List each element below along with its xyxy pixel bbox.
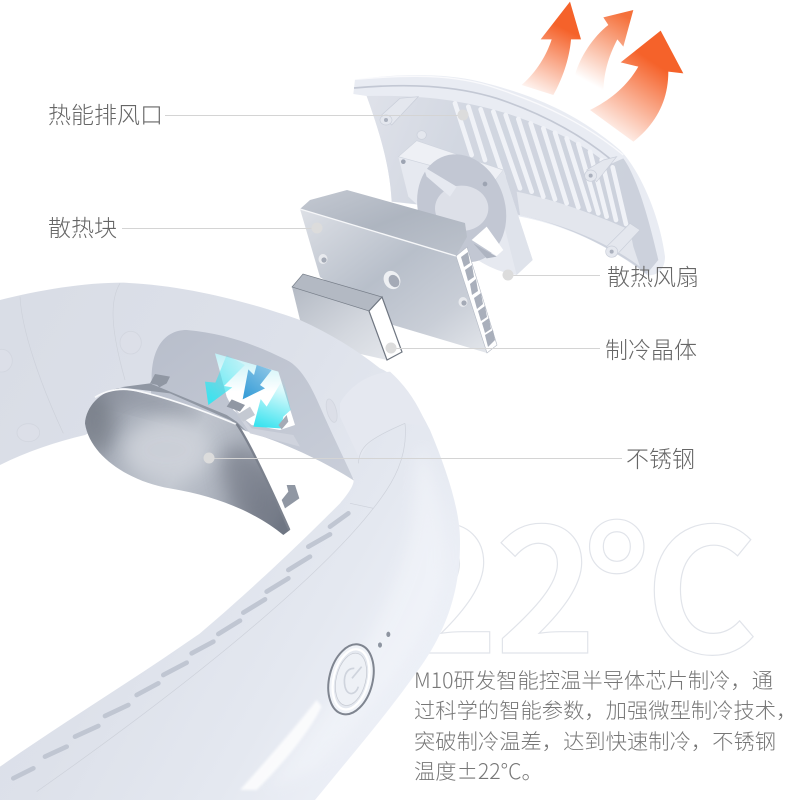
description text block: 突破制冷温差，达到快速制冷，不锈钢 bbox=[414, 725, 776, 756]
window recess bbox=[150, 330, 354, 481]
callout: 散热块: 散热块 bbox=[48, 209, 117, 243]
cooling fan bbox=[398, 141, 533, 275]
description text block bbox=[414, 664, 797, 786]
callout: 制冷晶体 bbox=[386, 331, 697, 365]
cooling crystal bbox=[292, 274, 402, 360]
plate shading bbox=[85, 391, 274, 526]
band seams bbox=[20, 283, 405, 792]
callout: 制冷晶体: 制冷晶体 bbox=[605, 331, 697, 365]
large outlined temperature text 22°C: 2 bbox=[397, 453, 498, 703]
callout: 散热风扇 bbox=[502, 258, 699, 292]
callout: 热能排风口: 热能排风口 bbox=[48, 96, 163, 130]
power button bbox=[321, 639, 381, 719]
callout: 散热块 bbox=[48, 209, 322, 243]
heat sink block bbox=[300, 190, 497, 353]
description text block: 温度±22°C。 bbox=[414, 755, 543, 786]
heat exhaust arrows bbox=[522, 2, 683, 142]
vent ribs bbox=[455, 103, 626, 224]
description text block: M10研发智能控温半导体芯片制冷，通 bbox=[414, 664, 773, 695]
heat sink fins bbox=[456, 247, 497, 353]
cyan airflow arrows bbox=[205, 355, 291, 428]
screw posts bbox=[380, 97, 640, 257]
round dimples bbox=[0, 331, 339, 442]
exhaust vent cover shell bbox=[353, 75, 665, 275]
callout: 散热风扇: 散热风扇 bbox=[607, 258, 699, 292]
glossy highlight bbox=[240, 700, 322, 790]
ventilation slots bbox=[13, 513, 348, 778]
lit outer shoulder bbox=[267, 443, 445, 790]
description text block: 过科学的智能参数，加强微型制冷技术， bbox=[414, 694, 797, 725]
indicator lights bbox=[378, 632, 390, 648]
heat sink holes bbox=[318, 254, 468, 307]
large outlined temperature text 22°C bbox=[397, 453, 758, 703]
large outlined temperature text 22°C: C bbox=[645, 453, 758, 703]
callout: 不锈钢: 不锈钢 bbox=[626, 440, 695, 474]
callout: 热能排风口 bbox=[48, 96, 468, 130]
stainless steel plate bbox=[80, 374, 299, 536]
steel clips bbox=[120, 374, 299, 508]
callout: 不锈钢 bbox=[204, 440, 695, 474]
cooling airflow window bbox=[205, 353, 300, 447]
large outlined temperature text 22°C: ° bbox=[582, 453, 652, 703]
large outlined temperature text 22°C: 2 bbox=[495, 453, 596, 703]
fan hub and blades bbox=[423, 167, 503, 258]
neckband body bbox=[0, 283, 460, 800]
